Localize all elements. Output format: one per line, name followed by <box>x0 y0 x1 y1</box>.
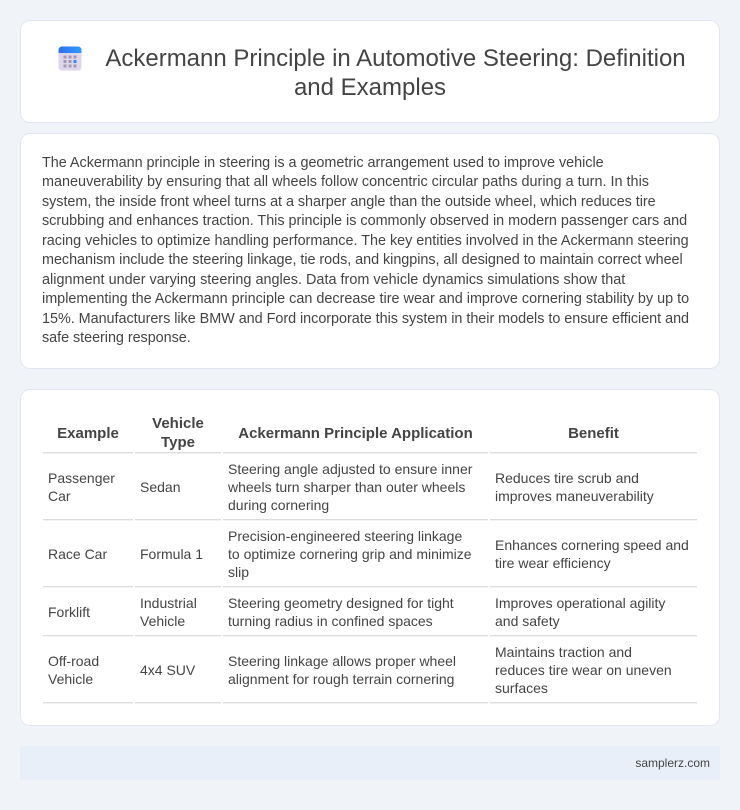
table row: Off-road Vehicle: Vehicle <box>48 671 93 687</box>
table header <box>57 415 619 451</box>
table header: Example <box>57 425 119 442</box>
table row: Off-road Vehicle <box>48 644 672 696</box>
table row: Off-road Vehicle: Steering linkage allows proper wheel <box>228 653 456 669</box>
table row: Passenger Car: improves maneuverability <box>495 488 654 504</box>
title <box>105 45 686 101</box>
table row: Passenger Car: Sedan <box>140 479 180 495</box>
table row: Forklift: Vehicle <box>140 613 185 629</box>
table row: Forklift: Forklift <box>48 604 90 620</box>
table row: Forklift: Steering geometry designed for tight <box>228 595 454 611</box>
table header: Ackermann Principle Application <box>238 425 473 442</box>
table row: Race Car: Precision-engineered steering linkage <box>228 528 462 544</box>
text block: description paragraph: mechanism include the steering linkage, tie rods, and kingpins, all designed to maintain correct wheel <box>42 252 683 268</box>
table row: Forklift: turning radius in confined spaces <box>228 613 433 629</box>
table row: Off-road Vehicle: Maintains traction and <box>495 644 632 660</box>
text block: description paragraph: system, the inside front wheel turns at a sharper angle than the outside wheel, which reduces tire <box>42 194 656 210</box>
text block: description paragraph: 15%. Manufacturers like BMW and Ford incorporate this system in their models to ensure efficient and <box>42 311 689 327</box>
table row: Race Car: Formula 1 <box>140 546 203 562</box>
table row: Race Car: slip <box>228 564 249 580</box>
table row: Off-road Vehicle: alignment for rough terrain cornering <box>228 671 454 687</box>
table row: Passenger Car: wheels turn sharper than outer wheels <box>228 479 465 495</box>
table row: Forklift: Industrial <box>140 595 197 611</box>
table header: Type <box>161 434 195 451</box>
text block: description paragraph: maneuverability by ensuring that all wheels follow concentric circular paths during a turn. In this <box>42 174 649 190</box>
table row: Race Car <box>48 528 689 580</box>
icon: calendar <box>58 46 82 70</box>
table row: Forklift: Improves operational agility <box>495 595 665 611</box>
text block: description paragraph: alignment under varying steering angles. Data from vehicle dynamics simulations show that <box>42 272 625 288</box>
table row: Passenger Car <box>48 461 654 513</box>
text block: description paragraph: scrubbing and enhances traction. This principle is commonly observed in modern passenger cars and <box>42 213 687 229</box>
table header: Benefit <box>568 425 619 442</box>
table row: Race Car: Enhances cornering speed and <box>495 537 689 553</box>
table row: Off-road Vehicle: reduces tire wear on uneven <box>495 662 672 678</box>
table row: Off-road Vehicle: Off-road <box>48 653 99 669</box>
table row: Passenger Car: Reduces tire scrub and <box>495 470 639 486</box>
title: Ackermann Principle in Automotive Steering: Definition <box>105 45 686 72</box>
table row: Forklift: and safety <box>495 613 560 629</box>
table row: Off-road Vehicle: 4x4 SUV <box>140 662 195 678</box>
table row: Off-road Vehicle: surfaces <box>495 680 548 696</box>
footer source text: samplerz.com <box>635 756 710 770</box>
panel: description <box>20 133 720 369</box>
text block: description paragraph <box>42 155 689 346</box>
panel: examples table <box>20 389 720 726</box>
table row: Passenger Car: Car <box>48 488 71 504</box>
title: and Examples <box>294 74 446 101</box>
table row: Forklift <box>48 595 666 629</box>
footer bar <box>20 746 720 780</box>
text block: description paragraph: safe steering response. <box>42 330 191 346</box>
text block: description paragraph: The Ackermann principle in steering is a geometric arrangement used to improve vehicle <box>42 155 604 171</box>
table row: Race Car: tire wear efficiency <box>495 555 611 571</box>
table row: Race Car: Race Car <box>48 546 107 562</box>
text block: description paragraph: implementing the Ackermann principle can decrease tire wear and improve cornering stability by up to <box>42 291 689 307</box>
text block: description paragraph: racing vehicles to optimize handling performance. The key entities involved in the Ackermann steering <box>42 233 689 249</box>
panel: title card <box>20 20 720 123</box>
table row: Passenger Car: during cornering <box>228 497 329 513</box>
table row: Passenger Car: Passenger <box>48 470 115 486</box>
table header: Vehicle <box>152 415 204 432</box>
table row: Passenger Car: Steering angle adjusted to ensure inner <box>228 461 472 477</box>
table row: Race Car: to optimize cornering grip and minimize <box>228 546 472 562</box>
